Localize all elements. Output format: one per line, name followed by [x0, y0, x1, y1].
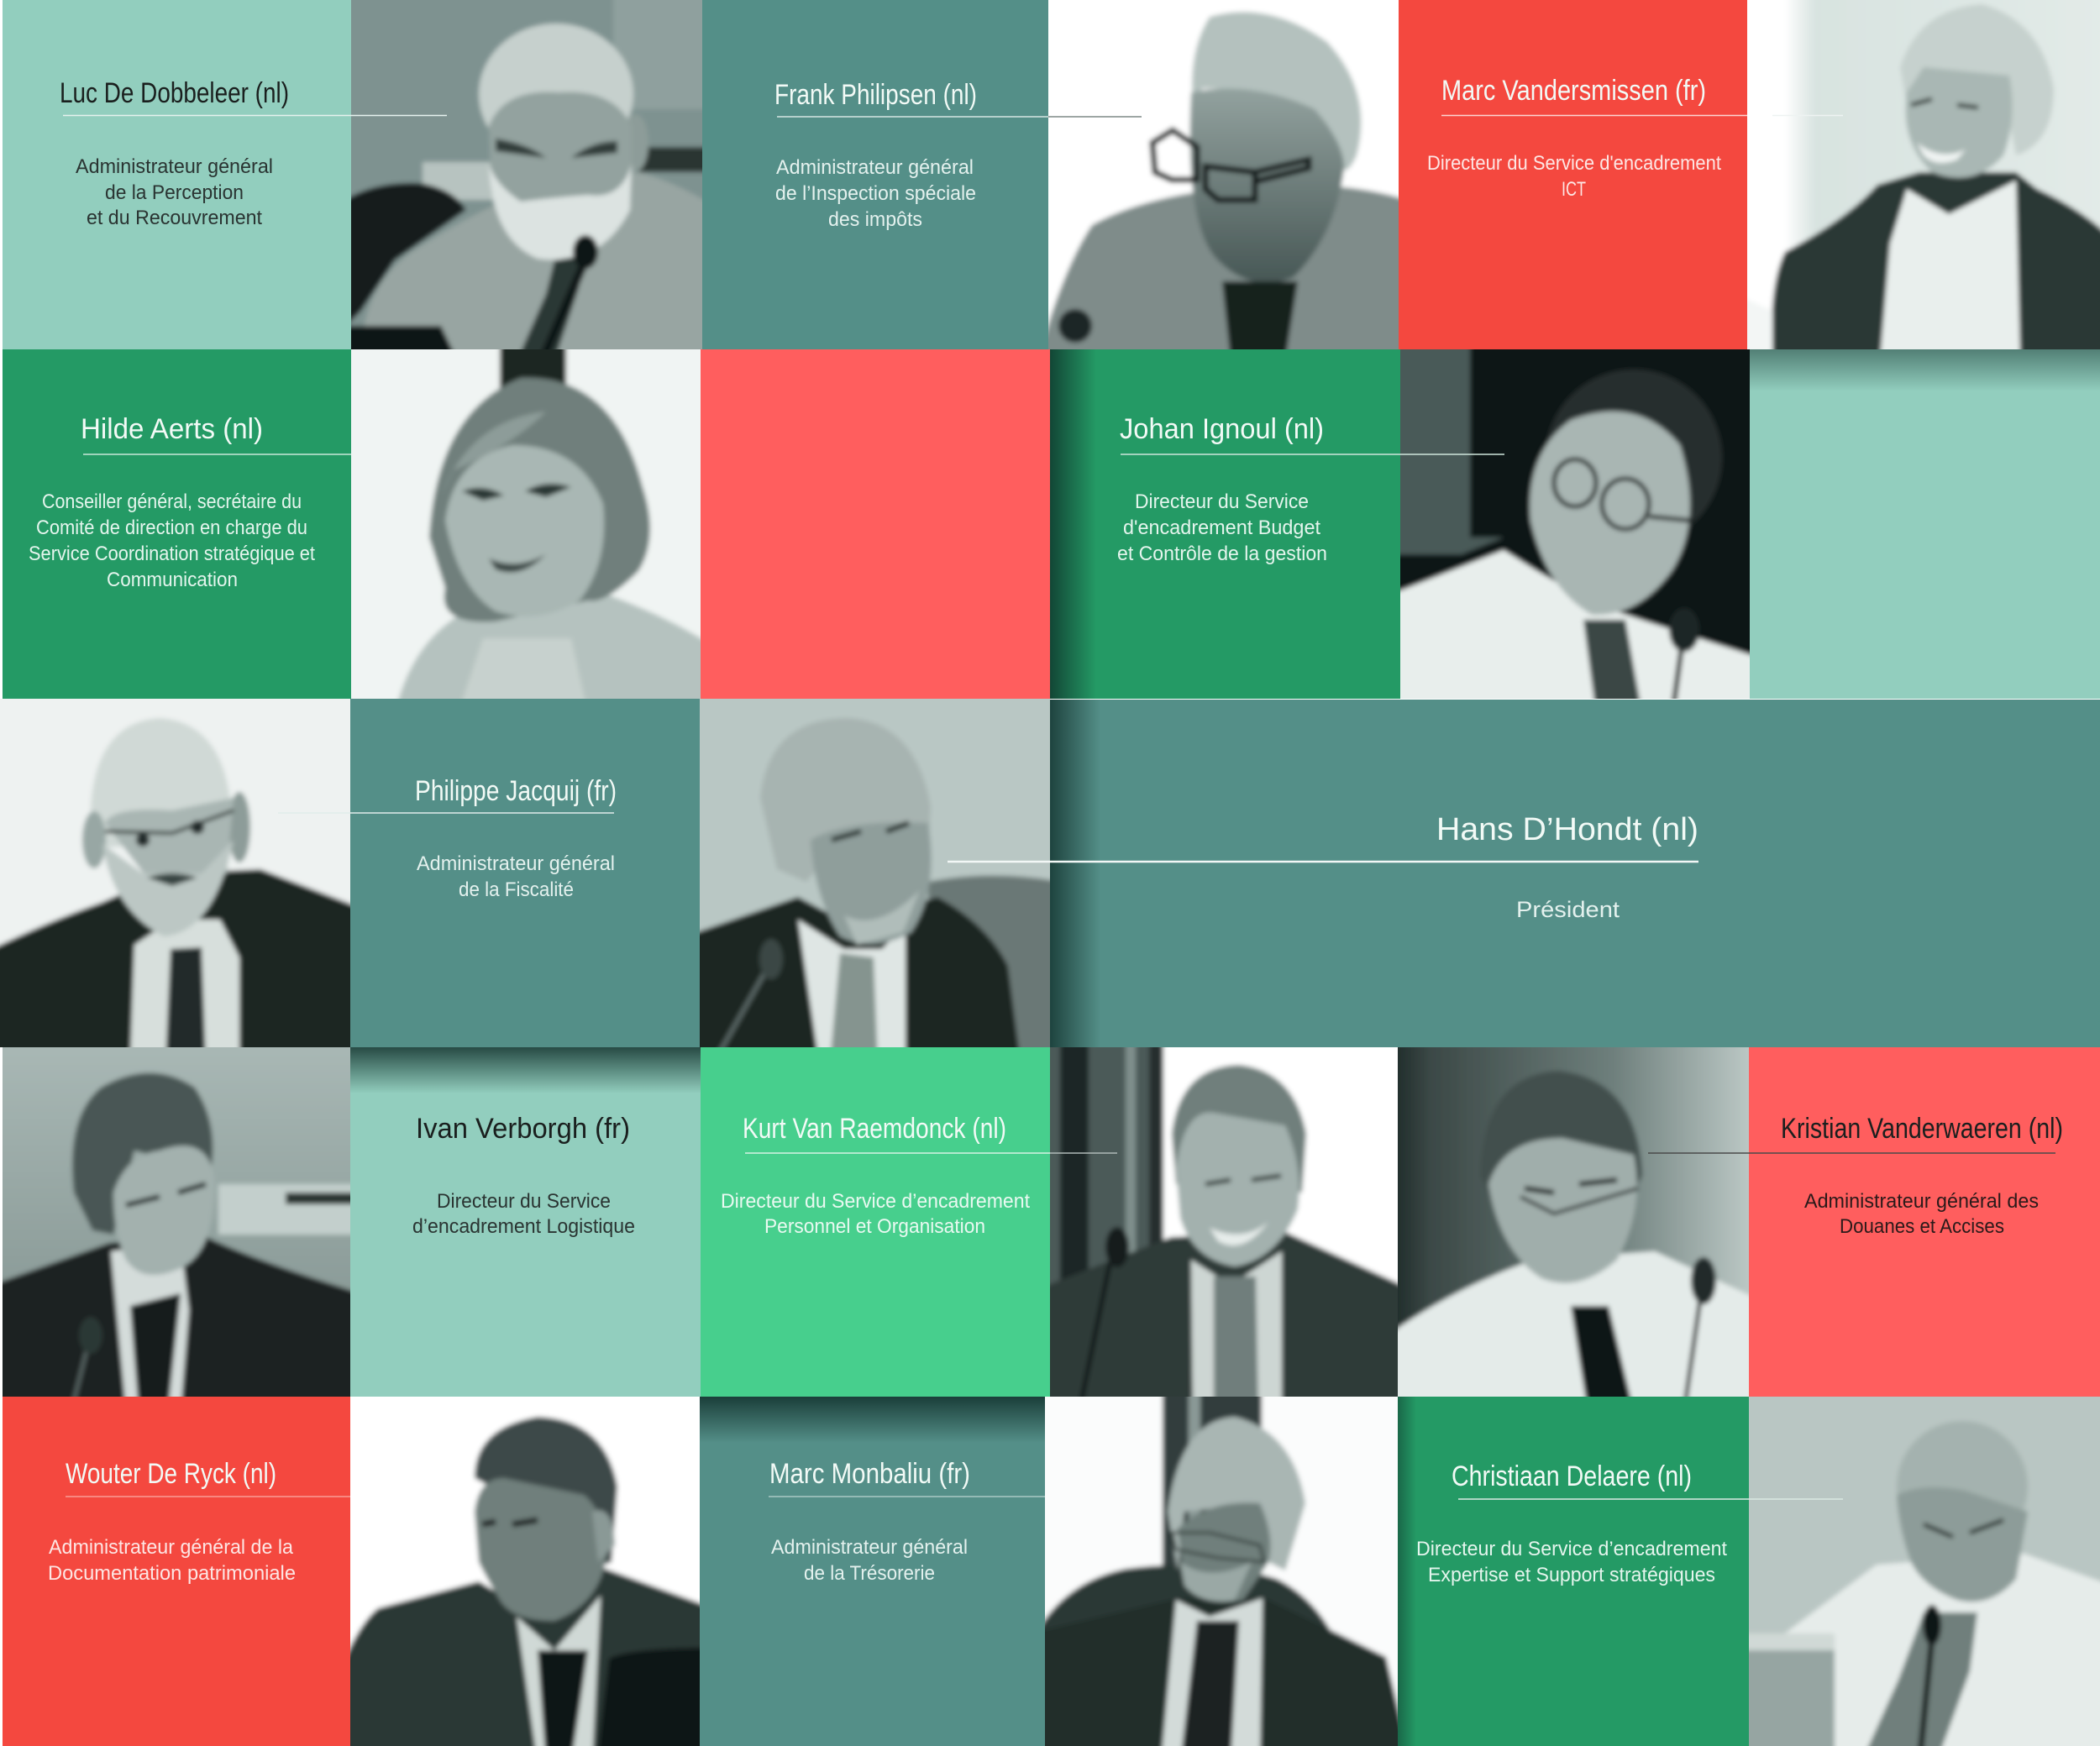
role: Directeur du Service d'encadrement: [1427, 152, 1721, 175]
panel: Frank Philipsen: [702, 0, 1142, 349]
photo: Marc Vandersmissen: [1730, 0, 2100, 370]
panel: Johan Ignoul: [1050, 349, 1504, 699]
role: d'encadrement Budget: [1123, 516, 1320, 539]
name: Hans D’Hondt (nl): [1436, 812, 1698, 847]
panel: Luc De Dobbeleer: [3, 0, 447, 349]
panel: Hans D'Hondt: [948, 700, 2100, 1047]
photo: Ivan Verborgh: [3, 1047, 350, 1397]
name: Johan Ignoul (nl): [1120, 413, 1324, 445]
photo: Wouter De Ryck: [350, 1413, 700, 1746]
role: Conseiller général, secrétaire du: [42, 490, 302, 513]
role: Directeur du Service: [1135, 490, 1309, 513]
photo: Marc Monbaliu: [1045, 1397, 1398, 1746]
role: Directeur du Service: [437, 1190, 611, 1213]
panel: Marc Vandersmissen: [1399, 0, 1843, 349]
role: Personnel et Organisation: [764, 1215, 985, 1238]
role: [1804, 1190, 2039, 1238]
photo: Luc De Dobbeleer: [351, 0, 702, 349]
role: [775, 156, 976, 231]
role: Administrateur général: [776, 156, 974, 179]
name: Hilde Aerts (nl): [81, 413, 263, 445]
name: Philippe Jacquij (fr): [415, 775, 617, 807]
role: Directeur du Service d’encadrement: [1416, 1538, 1727, 1560]
role: des impôts: [828, 208, 922, 231]
photo: Philippe Jacquij: [0, 699, 350, 1047]
panel: Wouter De Ryck: [3, 1397, 350, 1746]
name: Frank Philipsen (nl): [774, 79, 977, 111]
panel: Kurt Van Raemdonck: [701, 1047, 1117, 1397]
photo: Hans D'Hondt: [700, 699, 1050, 1047]
panel: light teal empty tile: [1750, 349, 2100, 699]
role: [412, 1190, 635, 1238]
role: d’encadrement Logistique: [412, 1215, 635, 1238]
name: Christiaan Delaere (nl): [1452, 1460, 1692, 1492]
panel: coral empty tile: [701, 349, 1050, 699]
role: [721, 1190, 1030, 1238]
photo: Christiaan Delaere: [1735, 1382, 2100, 1746]
panel: Ivan Verborgh: [350, 1047, 701, 1397]
role: de la Perception: [105, 181, 244, 204]
role: [1117, 490, 1327, 565]
role: Directeur du Service d’encadrement: [721, 1190, 1030, 1213]
panel: Kristian Vanderwaeren: [1648, 1047, 2100, 1397]
role: Documentation patrimoniale: [48, 1562, 296, 1585]
role: de la Fiscalité: [459, 878, 574, 901]
name: Marc Monbaliu (fr): [769, 1458, 970, 1490]
role: Communication: [107, 569, 238, 591]
role: Administrateur général: [771, 1536, 968, 1559]
role: [48, 1536, 296, 1585]
role: [771, 1536, 968, 1585]
role: Administrateur général des: [1804, 1190, 2039, 1213]
role: de la Trésorerie: [804, 1562, 935, 1585]
role: [1427, 152, 1721, 201]
role: Président: [1516, 897, 1620, 922]
role: [417, 852, 615, 901]
photo: Kristian Vanderwaeren: [1398, 1047, 1749, 1397]
role: Administrateur général: [76, 155, 273, 178]
role: ICT: [1562, 178, 1586, 201]
role: [1416, 1538, 1727, 1586]
photo: Kurt Van Raemdonck: [1050, 1047, 1398, 1397]
name: Ivan Verborgh (fr): [416, 1113, 630, 1145]
name: Wouter De Ryck (nl): [66, 1458, 276, 1490]
role: de l’Inspection spéciale: [775, 182, 976, 205]
photo: Johan Ignoul: [1400, 349, 1750, 699]
role: et du Recouvrement: [87, 207, 262, 229]
role: Administrateur général de la: [49, 1536, 294, 1559]
role: Douanes et Accises: [1840, 1215, 2004, 1238]
name: Kurt Van Raemdonck (nl): [743, 1113, 1006, 1145]
role: Comité de direction en charge du: [36, 516, 307, 539]
role: Service Coordination stratégique et: [29, 543, 315, 565]
panel: Philippe Jacquij: [278, 699, 700, 1047]
name: Marc Vandersmissen (fr): [1441, 75, 1706, 107]
role: Administrateur général: [417, 852, 615, 875]
role: Expertise et Support stratégiques: [1428, 1564, 1715, 1586]
panel: Marc Monbaliu: [700, 1397, 1045, 1746]
name: Luc De Dobbeleer (nl): [60, 77, 289, 109]
role: et Contrôle de la gestion: [1117, 543, 1327, 565]
panel: Hilde Aerts: [3, 349, 351, 699]
photo: Hilde Aerts: [351, 349, 701, 699]
photo: Frank Philipsen: [1048, 9, 1399, 349]
panel: Christiaan Delaere: [1398, 1397, 1843, 1746]
role: [76, 155, 273, 229]
role: [29, 490, 315, 591]
